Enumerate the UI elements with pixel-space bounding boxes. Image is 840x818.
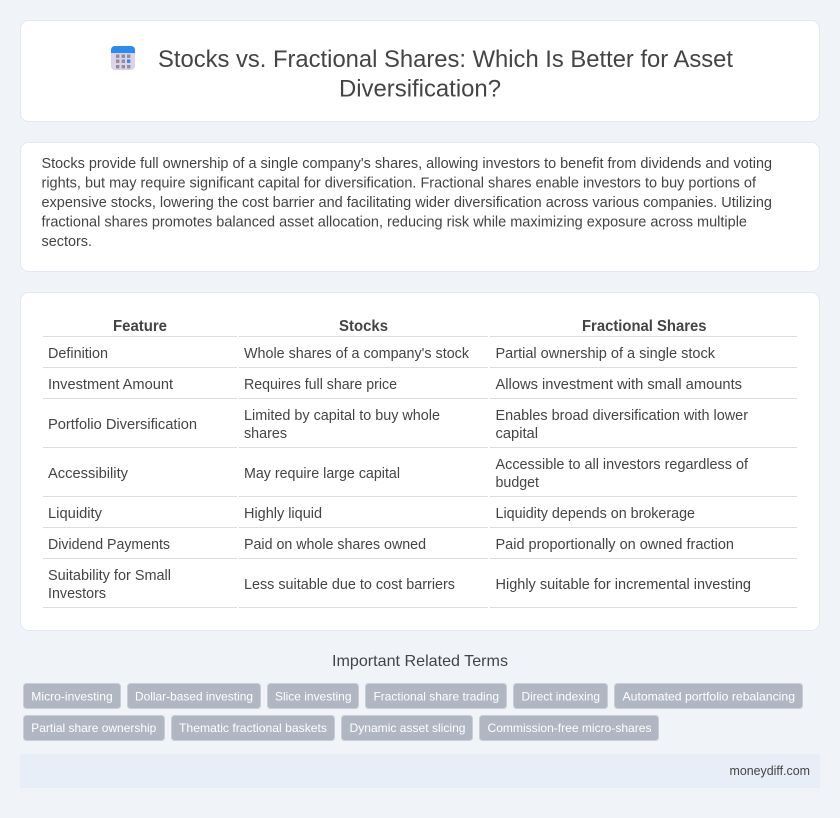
tag: commission-free micro-shares: Commission-free micro-shares <box>488 721 652 735</box>
text block: summary: sectors. <box>42 234 92 250</box>
row: liquidity: Liquidity depends on brokerage <box>496 506 695 522</box>
row: dividend payments: Dividend Payments <box>48 537 170 553</box>
row: accessibility: May require large capital <box>244 466 400 482</box>
row: definition: Whole shares of a company's stock <box>244 346 470 362</box>
tag: fractional share trading <box>366 684 506 708</box>
row: investment amount: Allows investment with small amounts <box>496 377 742 393</box>
tag: direct indexing: Direct indexing <box>522 690 600 704</box>
tag: dollar-based investing: Dollar-based investing <box>135 690 253 704</box>
tag: slice investing <box>268 684 358 708</box>
tag: automated portfolio rebalancing <box>614 684 802 708</box>
row: suitability for small investors: Highly suitable for incremental investing <box>496 577 751 593</box>
row: portfolio diversification: Portfolio Diversification <box>48 417 197 433</box>
row: portfolio diversification: shares <box>244 426 287 442</box>
row: accessibility <box>48 457 749 491</box>
tag: direct indexing <box>514 684 608 708</box>
panel: comparison table <box>20 292 820 630</box>
tag: micro-investing <box>24 684 120 708</box>
tag: commission-free micro-shares <box>480 716 658 740</box>
row: accessibility: Accessibility <box>48 466 129 482</box>
footer text: site name: moneydiff.com <box>730 764 810 778</box>
table header row: Stocks <box>339 318 388 335</box>
row: definition <box>48 346 716 362</box>
row: investment amount <box>48 377 742 393</box>
row: portfolio diversification: Enables broad diversification with lower <box>496 408 748 424</box>
text block: summary: rights, but may require significant capital for diversification. Fractional shares enable investors to buy portions of <box>42 176 757 192</box>
title: Diversification? <box>339 76 501 102</box>
tag: partial share ownership: Partial share ownership <box>31 721 157 735</box>
tag: micro-investing: Micro-investing <box>31 690 113 704</box>
tag list: related terms <box>24 684 802 740</box>
row: accessibility: Accessible to all investors regardless of <box>496 457 749 473</box>
tag: dynamic asset slicing <box>342 716 472 740</box>
tag: automated portfolio rebalancing: Automated portfolio rebalancing <box>622 690 795 704</box>
row: liquidity: Highly liquid <box>244 506 322 522</box>
row: suitability for small investors <box>48 568 751 602</box>
row: suitability for small investors: Investors <box>48 586 106 602</box>
icon: calendar <box>111 46 135 70</box>
row: investment amount: Investment Amount <box>48 377 173 393</box>
text block: summary: fractional shares promotes balanced asset allocation, reducing risk while maximizing exposure across multiple <box>42 214 747 230</box>
row: liquidity: Liquidity <box>48 506 103 522</box>
text block: summary: expensive stocks, lowering the cost barrier and facilitating wider diversification across various companies. Utilizing <box>42 195 772 211</box>
table header row <box>113 318 707 335</box>
tag: dynamic asset slicing: Dynamic asset slicing <box>350 721 466 735</box>
footer <box>20 754 820 788</box>
text block: summary <box>42 156 772 250</box>
tag: dollar-based investing <box>128 684 260 708</box>
row: definition: Definition <box>48 346 108 362</box>
heading: important related terms: Important Related Terms <box>332 653 508 670</box>
tag: thematic fractional baskets: Thematic fractional baskets <box>179 721 327 735</box>
tag: slice investing: Slice investing <box>275 690 352 704</box>
row: portfolio diversification: Limited by capital to buy whole <box>244 408 440 424</box>
title: Stocks vs. Fractional Shares: Which Is Better for Asset <box>158 46 733 73</box>
table header row: Fractional Shares <box>582 318 707 335</box>
row: definition: Partial ownership of a single stock <box>496 346 716 362</box>
tag: fractional share trading: Fractional share trading <box>374 690 499 704</box>
row: portfolio diversification: capital <box>496 426 538 442</box>
panel: header <box>20 20 820 122</box>
row: dividend payments: Paid proportionally on owned fraction <box>496 537 734 553</box>
title <box>158 46 733 102</box>
row: suitability for small investors: Less suitable due to cost barriers <box>244 577 455 593</box>
panel: summary paragraph <box>20 142 820 272</box>
text block: summary: Stocks provide full ownership of a single company's shares, allowing investors to benefit from dividends and voting <box>42 156 772 172</box>
tag: partial share ownership <box>24 716 164 740</box>
table header row: Feature <box>113 318 167 335</box>
row: dividend payments <box>48 537 734 553</box>
row: suitability for small investors: Suitability for Small <box>48 568 171 584</box>
row: liquidity <box>48 506 695 522</box>
row: investment amount: Requires full share price <box>244 377 397 393</box>
row: portfolio diversification <box>48 408 748 442</box>
row: accessibility: budget <box>496 475 539 491</box>
row: dividend payments: Paid on whole shares owned <box>244 537 426 553</box>
tag: thematic fractional baskets <box>172 716 334 740</box>
